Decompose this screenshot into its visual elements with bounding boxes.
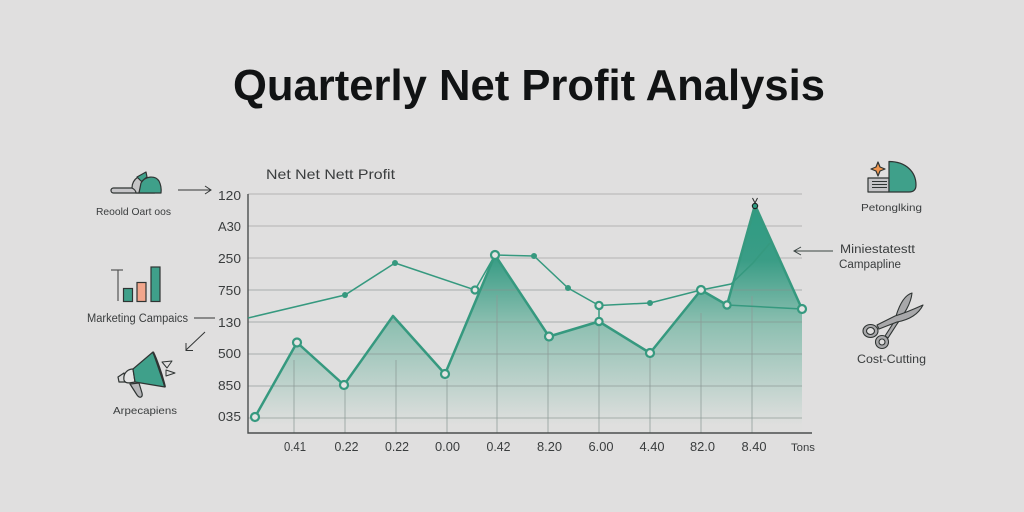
x axis labels: 8.40	[742, 440, 767, 454]
label: targeting: Petonglking	[861, 202, 922, 214]
arrow: marketing to megaphone	[186, 332, 205, 350]
open markers	[251, 251, 806, 421]
arrow: campaign to chart	[794, 247, 833, 255]
label: campaign	[839, 244, 916, 271]
small solid markers	[342, 253, 653, 306]
x axis labels: 82.0	[690, 440, 715, 454]
label: cost cutting: Cost-Cutting	[857, 354, 926, 366]
icon: bar chart	[111, 267, 160, 302]
x axis labels: 4.40	[640, 440, 665, 454]
arrow: records to axis	[178, 186, 211, 194]
connector: marketing to axis	[194, 317, 215, 319]
icon: megaphone	[118, 352, 175, 397]
axes	[248, 194, 812, 433]
x axis labels: 8.20	[537, 440, 562, 454]
y axis labels: 120	[218, 189, 241, 203]
line chart	[248, 194, 812, 433]
y axis labels: A30	[218, 220, 241, 234]
vertical drop lines	[294, 295, 752, 433]
peak marker	[752, 198, 758, 209]
title: Quarterly Net Profit Analysis	[233, 61, 825, 110]
label: megaphone: Arpecapiens	[113, 405, 177, 417]
y axis labels: 130	[218, 316, 241, 330]
label: records: Reoold Oart oos	[96, 206, 171, 218]
icon: targeting	[868, 162, 916, 192]
x axis labels: 0.22	[334, 440, 359, 454]
label: marketing campaigns: Marketing Campaics	[87, 313, 188, 325]
icon: scissors	[863, 293, 923, 348]
x axis labels: 0.41	[284, 440, 306, 454]
y axis labels: 250	[218, 252, 241, 266]
upper thin line series	[248, 243, 802, 322]
x axis labels	[284, 440, 816, 454]
y axis labels: 035	[218, 410, 241, 424]
y axis labels	[218, 189, 241, 424]
y axis labels: 850	[218, 379, 241, 393]
x axis labels: 0.00	[435, 440, 460, 454]
x axis labels: Tons	[791, 442, 816, 454]
upper grid lines	[248, 194, 802, 258]
icon: records cap	[111, 172, 161, 193]
lower grid lines	[248, 290, 802, 418]
y axis labels: 500	[218, 347, 241, 361]
label: campaign: Campapline	[839, 259, 901, 271]
x axis labels: 0.22	[385, 440, 409, 454]
y axis labels: 750	[218, 284, 241, 298]
area series fill	[255, 205, 802, 433]
x axis labels: 0.42	[486, 440, 511, 454]
x axis labels: 6.00	[588, 440, 614, 454]
main area series line	[255, 205, 802, 417]
label: campaign: Miniestatestt	[840, 244, 916, 256]
chart heading: Net Net Nett Profit	[266, 166, 395, 182]
